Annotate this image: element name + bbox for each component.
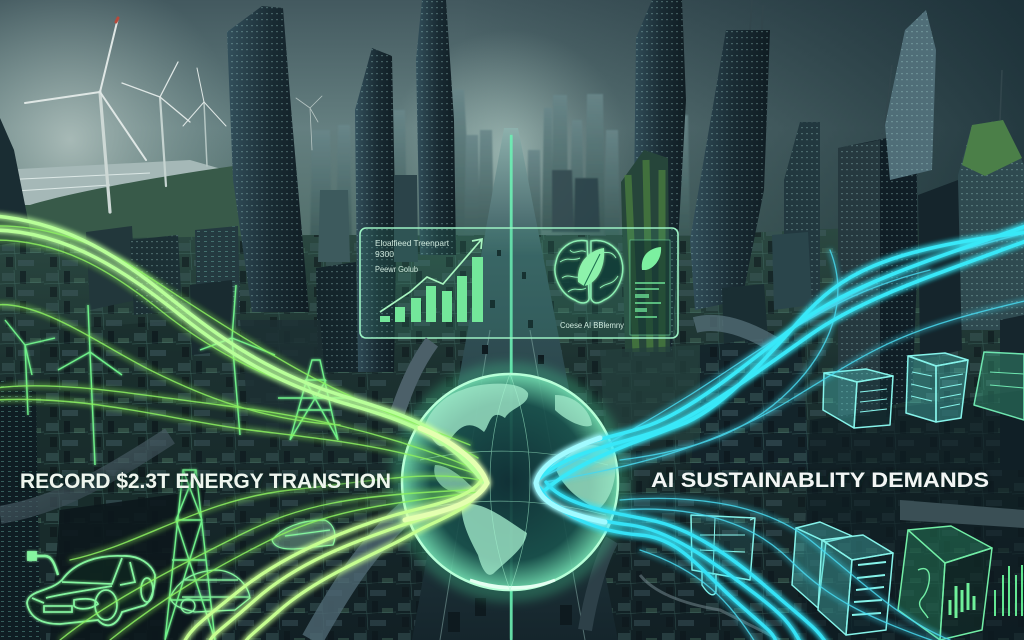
continents [425, 384, 616, 588]
heading: chart labels [375, 238, 450, 274]
icon: wireframe electric cars with charger [27, 520, 335, 625]
central thin vertical light beam [510, 135, 512, 640]
city ground [0, 220, 1024, 640]
globe [390, 362, 630, 602]
icon: wind turbines on the coast [25, 18, 322, 212]
arrow: rising trend line [380, 239, 482, 312]
cube: server block upper left [823, 369, 893, 428]
heading: chart labels: Peewr Golub [375, 264, 418, 274]
cube: front server block [818, 535, 893, 635]
chart: green energy stream [0, 216, 487, 640]
panel: transparent data overlay [360, 228, 678, 338]
skyscrapers right [600, 0, 1024, 640]
icon: green wireframe turbines and pylons [5, 285, 352, 640]
skyscrapers left [0, 0, 456, 640]
cube: wireframe block lower left [691, 515, 755, 595]
chart: green mini bars [995, 565, 1022, 616]
icon: brain with leaf [555, 241, 623, 303]
distant hazy skyline [310, 90, 690, 250]
pipelines [0, 323, 775, 640]
icon: cyan data-centre wireframe cubes [691, 352, 1024, 640]
bar chart: growth [380, 257, 483, 322]
road to vanishing point [412, 128, 618, 640]
panel: side data list [630, 240, 670, 335]
label: energy transition: RECORD $2.3T ENERGY TRANSTION [20, 470, 391, 493]
cube: back server block [792, 522, 852, 608]
chart: blue AI data stream [536, 225, 1024, 640]
cube: far-right green block [974, 352, 1024, 420]
heading: chart labels: 9300 [375, 249, 394, 259]
cube: green sustainability block [898, 526, 992, 640]
caption: brain: Coese AI BBlemny [560, 321, 624, 330]
heading: chart labels: Eloalfieed Treenpart [375, 238, 450, 248]
label: AI demands: AI SUSTAINABLITY DEMANDS [651, 469, 989, 492]
cube: server block upper right [906, 353, 968, 422]
sea and shoreline [0, 160, 300, 260]
